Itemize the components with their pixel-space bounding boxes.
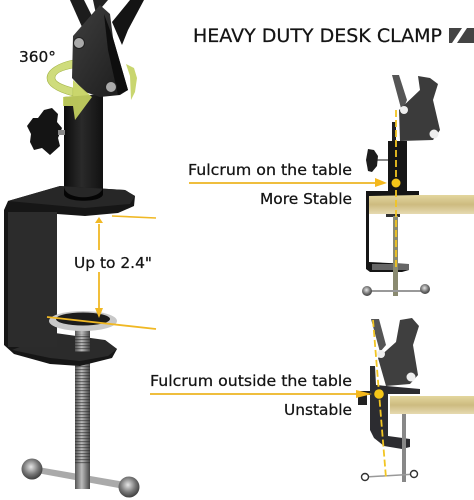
label: more stable: More Stable — [260, 190, 352, 208]
lower screw shaft — [75, 360, 90, 468]
unstable arrow — [150, 390, 372, 398]
upper bracket plate — [72, 5, 128, 97]
opening size dimension — [47, 216, 156, 329]
label: unstable: Unstable — [284, 401, 352, 419]
stable arrow — [189, 178, 387, 187]
fulcrum point — [374, 389, 384, 399]
yellow arrow head — [63, 80, 92, 120]
tightening knob — [27, 108, 65, 155]
center line — [395, 110, 397, 268]
label: fulcrum outside table: Fulcrum outside the table — [150, 372, 352, 390]
yellow rotation band back — [47, 60, 73, 96]
arm bars — [70, 0, 144, 45]
stable diagram — [362, 75, 474, 296]
screw and handle — [362, 414, 418, 482]
title: HEAVY DUTY DESK CLAMP — [193, 25, 442, 47]
screw and handle — [362, 216, 430, 296]
T handle — [22, 458, 140, 498]
arm and plate — [371, 318, 419, 386]
label: opening size: Up to 2.4" — [74, 254, 152, 272]
yellow band right — [126, 64, 137, 100]
tilted center line — [373, 320, 386, 478]
table — [368, 195, 474, 214]
table — [390, 396, 474, 414]
label: fulcrum on table: Fulcrum on the table — [188, 161, 352, 179]
main clamp photo — [4, 0, 144, 498]
label: rotation: 360° — [19, 48, 56, 66]
washer — [49, 311, 117, 352]
fulcrum point — [392, 178, 400, 188]
C clamp body — [4, 186, 135, 366]
clamp outline — [366, 191, 419, 272]
post and knob — [366, 122, 407, 192]
post base — [64, 186, 103, 201]
clamp side — [358, 366, 420, 449]
arm and plate — [392, 75, 440, 141]
post — [64, 94, 103, 199]
unstable diagram — [358, 318, 474, 482]
